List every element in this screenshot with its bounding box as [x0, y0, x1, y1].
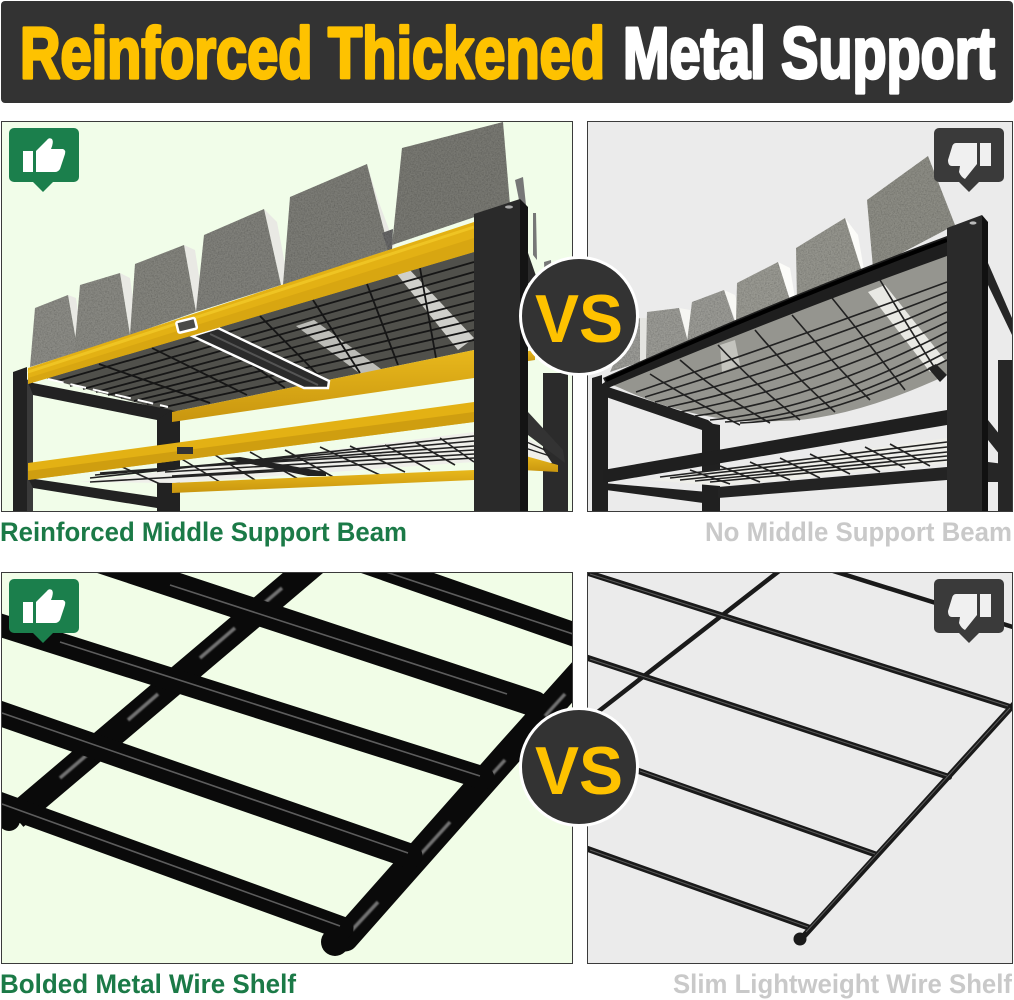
panel: no middle support beam, sagging shelf: [587, 121, 1013, 512]
lower black beam: [603, 410, 947, 483]
rear post and braces: [988, 263, 1012, 512]
lower shelf mesh: [80, 432, 552, 484]
front right post: [947, 215, 988, 512]
long wires: [0, 546, 590, 928]
icon: thumbs down, top: [934, 128, 1004, 192]
VS badge, top: VS: [535, 281, 623, 357]
icon: thumbs up, top: [9, 128, 79, 192]
lower shelf mesh: [648, 438, 947, 498]
caption: bolded metal wire shelf: Bolded Metal Wire Shelf: [0, 969, 297, 999]
panel: bolded metal wire shelf: [0, 546, 590, 964]
VS badge, top: [520, 258, 638, 374]
title: Reinforced Thickened: [20, 14, 605, 94]
long wires: [585, 570, 1014, 928]
front right post: [474, 199, 528, 512]
sagging wire mesh: [610, 245, 947, 425]
left and middle posts: [13, 367, 180, 512]
VS badge, bottom: [520, 708, 638, 826]
panel: reinforced shelf with middle support beam: [1, 121, 573, 512]
wire highlights: [2, 570, 573, 926]
wire end blob: [794, 932, 806, 946]
wire mesh shelf with load: [45, 245, 474, 412]
upper black beam: [603, 236, 947, 388]
icon: thumbs up, bottom: [9, 579, 79, 643]
left and middle posts: [592, 375, 720, 512]
front yellow beams: [172, 350, 558, 493]
header banner: [1, 1, 1013, 103]
VS badge, bottom: VS: [535, 733, 623, 809]
middle support beam with white outline: [192, 328, 329, 388]
cross wires: [590, 568, 1014, 938]
concrete blocks on sagging shelf: [610, 156, 955, 372]
caption: reinforced middle support beam: Reinforced Middle Support Beam: [0, 517, 407, 547]
wire highlights: [590, 574, 1010, 932]
upper yellow beam: [28, 222, 474, 384]
icon: thumbs down, bottom: [934, 579, 1004, 643]
cross wires: [15, 550, 585, 938]
concrete block glow sides: [638, 218, 864, 365]
concrete blocks on shelf: [30, 122, 510, 367]
lower middle support beam: [222, 457, 326, 476]
panel: slim lightweight wire shelf: [585, 568, 1014, 964]
wire end blobs: [0, 809, 349, 956]
rear post and braces: [515, 177, 568, 512]
lower yellow beam: [28, 402, 474, 480]
concrete block glow sides: [68, 170, 395, 336]
